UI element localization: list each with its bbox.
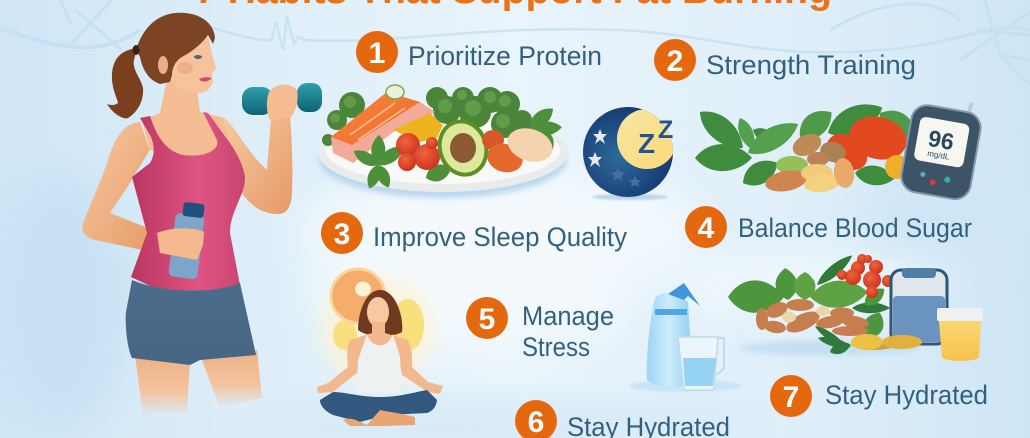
step 3 badge and label: 3 [334,218,350,251]
tank top [131,112,245,292]
illustration: protein plate [318,85,568,198]
icon: glucose meter [899,93,985,202]
illustration: water bottle and glass [629,283,741,392]
step 4 badge and label [685,206,972,248]
step 5 badge and label [466,297,614,362]
corn [393,113,443,142]
raised arm [223,116,292,214]
icon: moon with Zzz: Z [638,128,655,159]
ponytail [107,48,143,118]
illustration: woman with dumbbell and water bottle [82,13,322,416]
step 1 badge and label: 1 [369,37,385,70]
step 7 badge and label: 7 [783,381,799,414]
body and arms [317,322,443,394]
illustration: meditating woman [317,269,443,426]
feet [343,410,415,426]
back arm [82,122,160,253]
almonds [756,299,870,337]
cup [937,308,983,361]
icon: moon with Zzz: Z [658,116,673,144]
shorts [126,280,256,365]
white tank top [357,334,402,393]
illustration: greens, nuts, jar and cup [728,251,983,361]
step 5 badge and label: 5 [479,303,495,336]
eggs and sweet potato [482,123,557,176]
vegetables [845,110,911,166]
nuts [764,130,856,194]
step 2 badge and label [654,39,916,81]
hand on bottle [157,228,204,260]
broccoli [322,87,533,146]
step 4 badge and label: Balance Blood Sugar [738,213,972,243]
step 2 badge and label: 2 [667,45,683,78]
step 7 badge and label: Stay Hydrated [825,380,988,410]
head [165,33,216,93]
background: DNA and heartbeat line [0,0,1030,85]
step 2 badge and label: Strength Training [706,50,916,80]
step 3 badge and label: Improve Sleep Quality [373,222,627,252]
hair [136,13,215,84]
icon: glucose meter: mg/dL [927,149,951,162]
basil [351,103,562,191]
dumbbell [242,83,322,115]
rosemary and seeds [813,323,922,357]
neck and chest [142,80,235,160]
icon: moon with Zzz [583,107,677,200]
step 6 badge and label [515,400,730,438]
tomatoes [396,133,440,171]
step 3 badge and label [321,212,627,254]
avocado [430,113,496,183]
step 5 badge and label: Manage [522,301,614,331]
fist [267,85,298,120]
crossed legs [320,390,437,422]
step 1 badge and label: Prioritize Protein [408,41,602,71]
glass [678,337,718,390]
water bottle [168,202,205,280]
salmon [331,85,435,163]
illustration: leafy greens, nuts and glucose meter [693,93,985,202]
tomatoes [837,254,894,298]
jar [891,268,947,344]
icon: glucose meter: 96 [926,125,956,155]
legs [135,350,262,416]
step 7 badge and label [770,375,988,417]
step 1 badge and label [356,31,602,73]
step 4 badge and label: 4 [698,212,715,245]
face details [158,55,212,82]
hair and head [358,290,402,336]
step 5 badge and label: Stress [522,332,590,362]
